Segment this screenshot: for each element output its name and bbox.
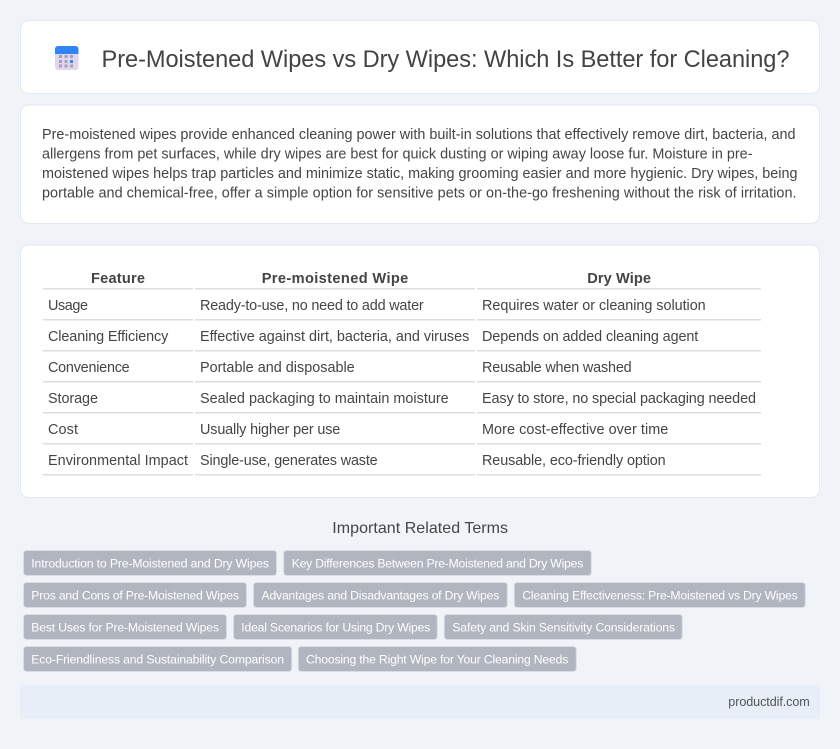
tag: Best Uses for Pre-Moistened Wipes: [31, 620, 219, 634]
icon: calendar: [55, 46, 78, 70]
tag: [284, 550, 591, 576]
table row: environmental impact: Reusable, eco-friendly option: [482, 453, 666, 469]
title: Pre-Moistened Wipes vs Dry Wipes: Which Is Better for Cleaning?: [102, 47, 790, 73]
tag: Introduction to Pre-Moistened and Dry Wipes: [31, 556, 269, 570]
table row: cost: Usually higher per use: [200, 422, 340, 438]
tag: [24, 582, 246, 608]
panel: related term tags: [24, 550, 805, 672]
tag: [24, 646, 292, 672]
table row: storage: [43, 391, 761, 414]
table row: cleaning efficiency: Cleaning Efficiency: [48, 329, 169, 345]
table row: convenience: Convenience: [48, 360, 130, 376]
tag: Key Differences Between Pre-Moistened and Dry Wipes: [292, 556, 583, 570]
tag: Advantages and Disadvantages of Dry Wipes: [262, 588, 499, 602]
table row: cleaning efficiency: Depends on added cleaning agent: [482, 329, 698, 345]
tag: Eco-Friendliness and Sustainability Comparison: [31, 652, 284, 666]
text block: introduction: portable and chemical-free, offer a simple option for sensitive pets or on-the-go freshening without the risk of irritation.: [42, 186, 796, 202]
tag: Choosing the Right Wipe for Your Cleaning Needs: [306, 652, 568, 666]
tag: [24, 614, 226, 640]
tag: [24, 550, 276, 576]
table row: convenience: Portable and disposable: [200, 360, 355, 376]
table heading row: Feature: [91, 271, 145, 287]
tag: Cleaning Effectiveness: Pre-Moistened vs Dry Wipes: [522, 588, 798, 602]
table row: cleaning efficiency: [43, 329, 761, 352]
table row: environmental impact: [43, 453, 761, 476]
table heading row: Dry Wipe: [587, 271, 651, 287]
text block: introduction: Pre-moistened wipes provide enhanced cleaning power with built-in solutions that effectively remove dirt, bacteria, and: [42, 127, 796, 143]
table row: convenience: Reusable when washed: [482, 360, 632, 376]
text block: introduction: [42, 127, 798, 202]
text block: introduction: moistened wipes helps trap particles and minimize static, making grooming easier and more hygienic. Dry wipes, being: [42, 166, 798, 182]
table row: usage: Ready-to-use, no need to add water: [200, 298, 424, 314]
tag: [514, 582, 805, 608]
footer: [20, 685, 820, 719]
table row: usage: Usage: [48, 298, 88, 314]
table row: storage: Easy to store, no special packaging needed: [482, 391, 756, 407]
table row: storage: Storage: [48, 391, 98, 407]
table row: cost: [43, 422, 761, 444]
tag: [444, 614, 682, 640]
table row: cost: More cost-effective over time: [482, 422, 668, 438]
table row: usage: [43, 298, 761, 320]
table heading row: Pre-moistened Wipe: [262, 271, 408, 287]
table row: environmental impact: Environmental Impact: [48, 453, 188, 469]
table row: cost: Cost: [48, 422, 78, 438]
tag: Safety and Skin Sensitivity Considerations: [452, 620, 675, 634]
table row: cleaning efficiency: Effective against dirt, bacteria, and viruses: [200, 329, 469, 345]
panel: comparison table: [20, 245, 820, 498]
tag: Ideal Scenarios for Using Dry Wipes: [241, 620, 430, 634]
table row: usage: Requires water or cleaning solution: [482, 298, 706, 314]
text block: introduction: allergens from pet surfaces, while dry wipes are best for quick dusting or wiping away loose fur. Moisture in pre-: [42, 146, 753, 162]
panel: header: [20, 20, 820, 94]
tag: [234, 614, 437, 640]
tag: Pros and Cons of Pre-Moistened Wipes: [31, 588, 239, 602]
table row: convenience: [43, 360, 761, 382]
table row: storage: Sealed packaging to maintain moisture: [200, 391, 449, 407]
panel: introduction: [20, 105, 820, 224]
tag: [298, 646, 576, 672]
table heading row: [43, 271, 761, 290]
tag: [254, 582, 507, 608]
footer: productdif.com: [728, 695, 810, 709]
heading: important related terms: Important Related Terms: [332, 520, 508, 537]
table row: environmental impact: Single-use, generates waste: [200, 453, 378, 469]
